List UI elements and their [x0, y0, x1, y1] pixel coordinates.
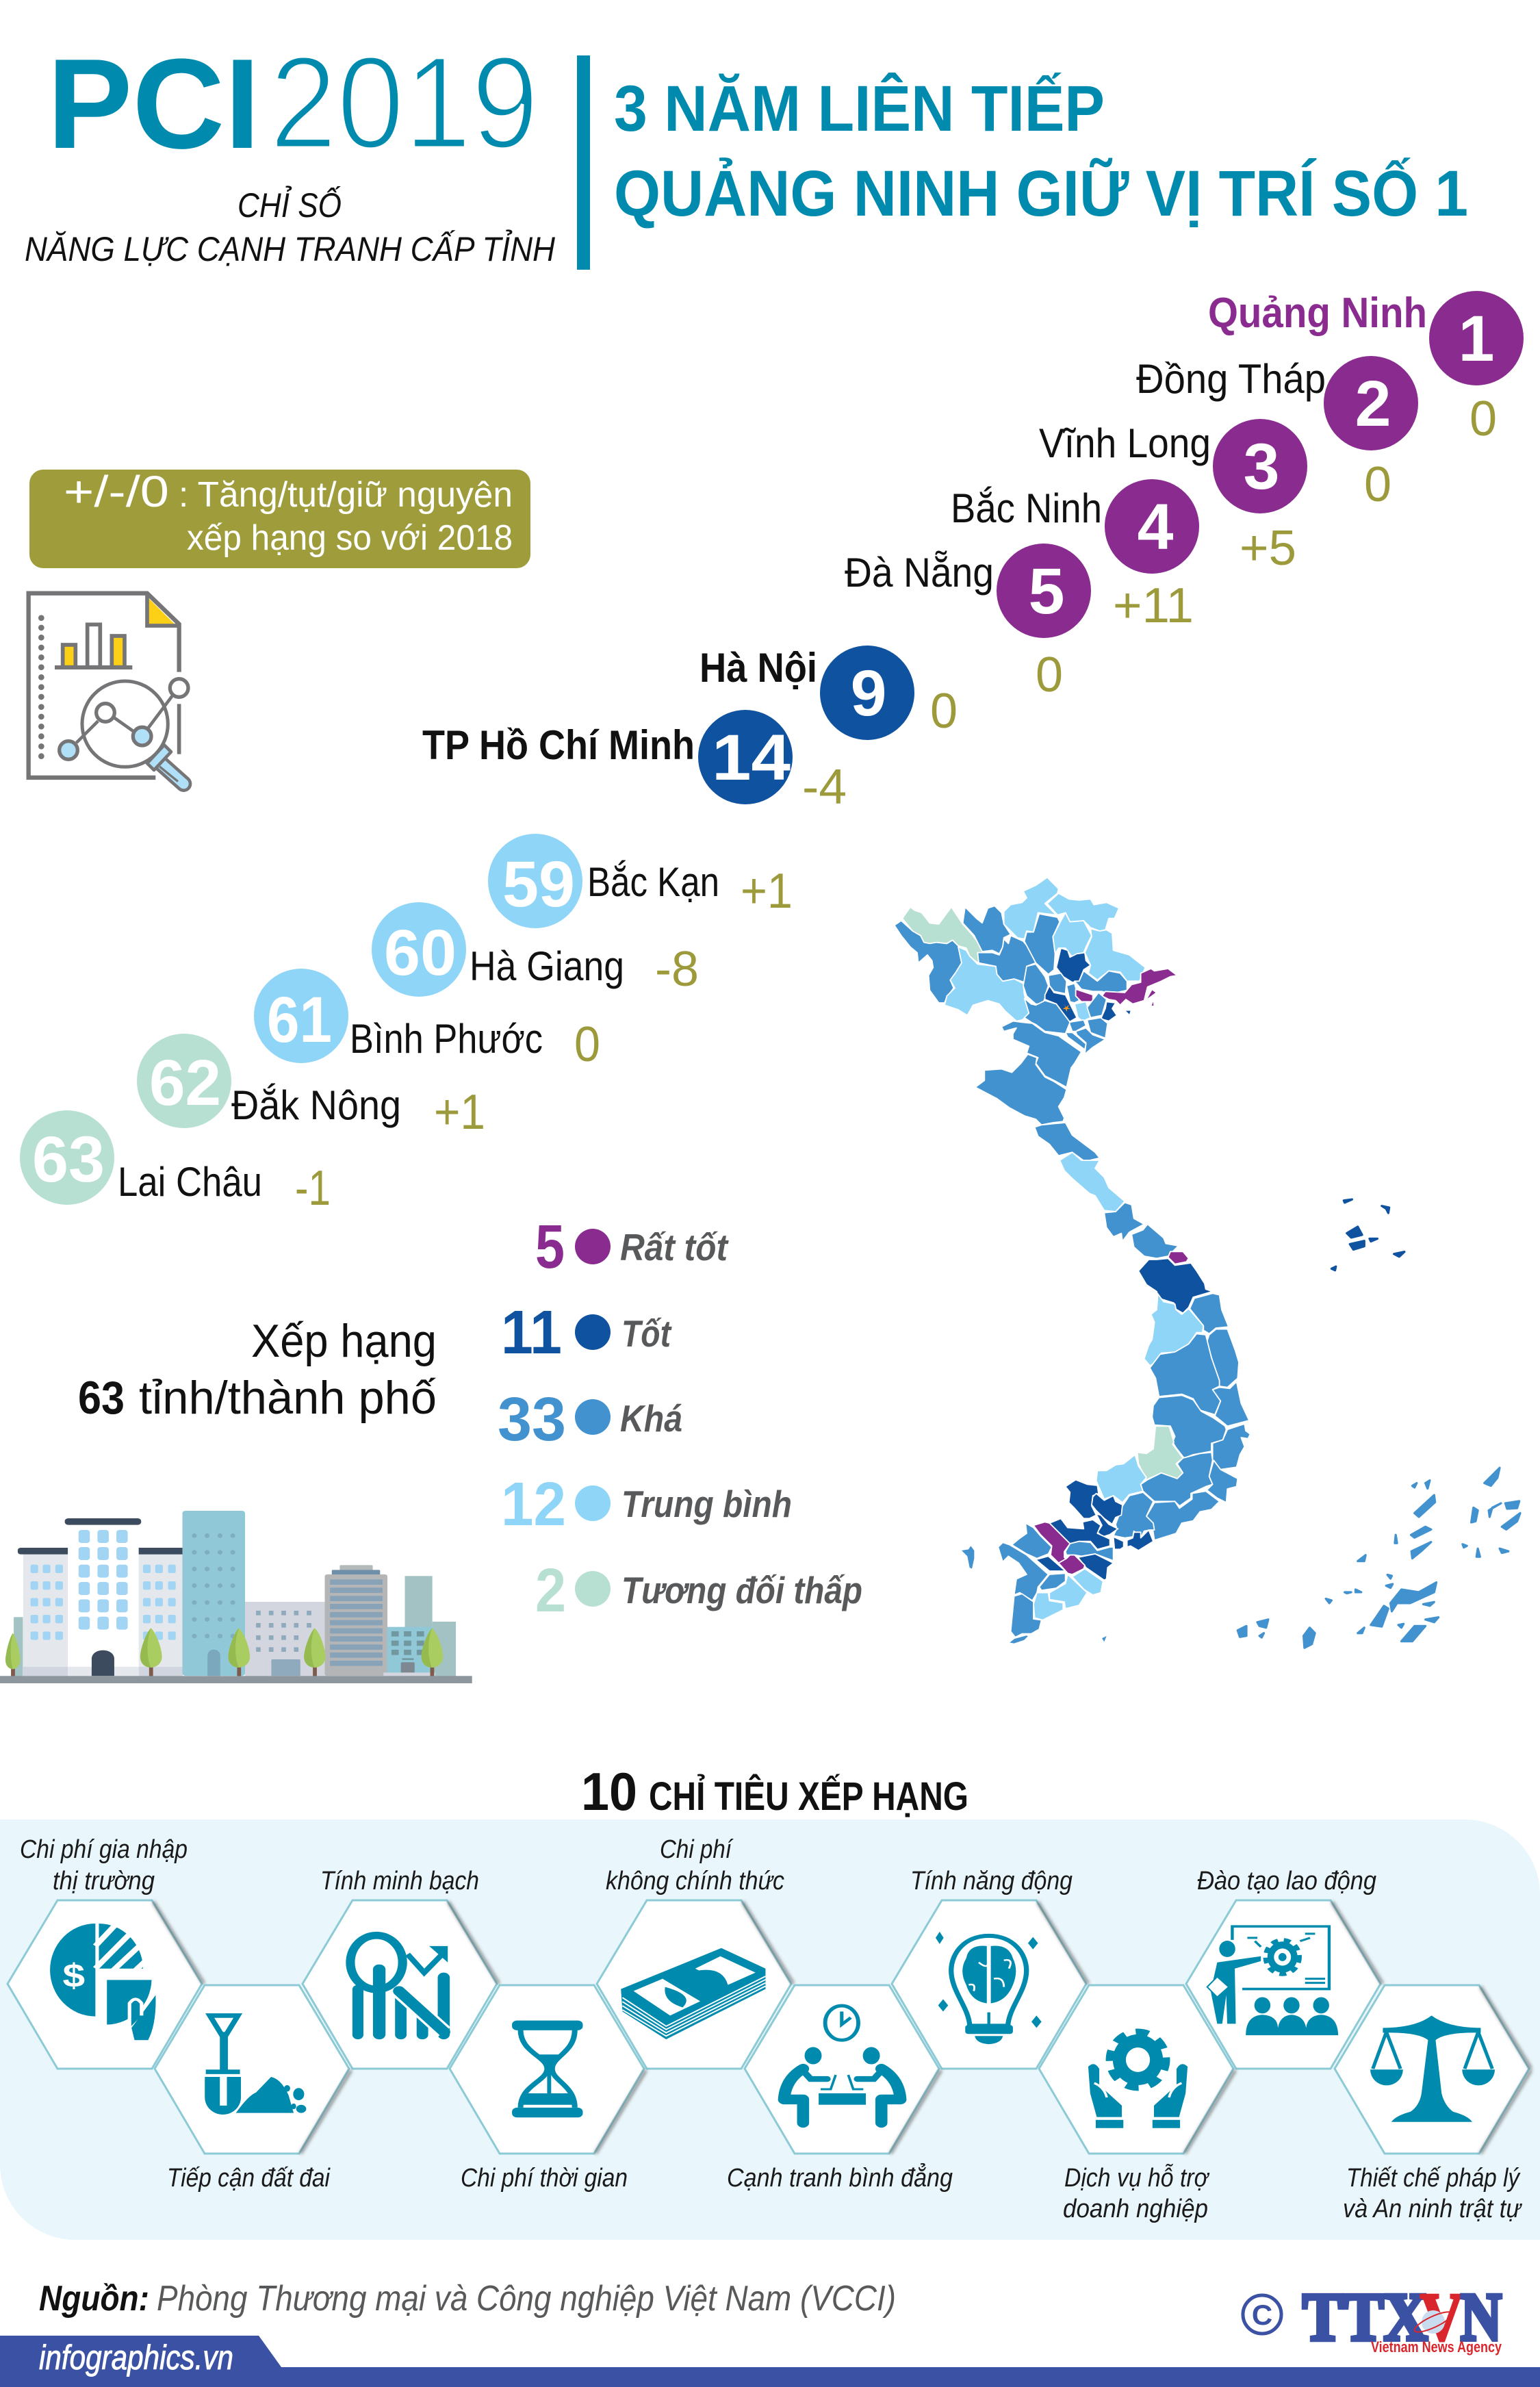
rank 5: Đà Nẵng: 5: [1029, 555, 1064, 628]
headline: QUẢNG NINH GIỮ VỊ TRÍ SỐ 1: [614, 157, 1468, 230]
rank 9: Hà Nội: Hà Nội: [700, 645, 817, 691]
icon: dynamism brain bulb: [936, 1932, 1042, 2044]
criteria labels: Tính minh bạch: [320, 1867, 479, 1895]
map legend: [498, 1213, 862, 1625]
icon: market entry cost: $: [62, 1958, 85, 1994]
caption: ranking of 63 provinces: Xếp hạng: [251, 1315, 437, 1367]
map: north central coast: [1060, 1152, 1213, 1313]
icon: informal charges money stack: [621, 1948, 765, 2039]
icons right half: [784, 1926, 1495, 2128]
criteria labels: Thiết chế pháp lý: [1346, 2164, 1521, 2193]
rank 60: Hà Giang: Hà Giang: [470, 943, 624, 989]
subtitle: provincial competitiveness index: NĂNG LỰC CẠNH TRANH CẤP TỈNH: [25, 229, 556, 268]
footer bar with site name: infographics.vn: [39, 2338, 233, 2377]
criteria labels: không chính thức: [606, 1867, 784, 1895]
rank 61: Bình Phước: [254, 969, 600, 1072]
bottom ranked provinces: [20, 834, 793, 1216]
logo: TTXVN copyright: TTX: [1302, 2279, 1428, 2355]
rank 2: Đồng Tháp: 2: [1355, 368, 1391, 440]
legend: very good: [535, 1213, 729, 1281]
rank 3: Vĩnh Long: Vĩnh Long: [1039, 420, 1211, 466]
legend: relatively low: [535, 1557, 862, 1625]
heading: 10 ranking criteria: 10: [581, 1761, 637, 1822]
criteria labels: Chi phí thời gian: [461, 2164, 628, 2193]
rank 2: Đồng Tháp: [1136, 356, 1418, 512]
legend: fair: 33: [498, 1386, 566, 1454]
legend: fair: [498, 1386, 682, 1454]
rank 60: Hà Giang: [372, 902, 699, 997]
rank 63: Lai Châu: [20, 1110, 331, 1216]
criteria labels: Tiếp cận đất đai: [167, 2164, 331, 2193]
logo: TTXVN copyright: N: [1461, 2279, 1502, 2355]
rank 2: Đồng Tháp: Đồng Tháp: [1136, 356, 1326, 402]
criteria labels: Đào tạo lao động: [1197, 1867, 1376, 1895]
criteria labels: thị trường: [53, 1867, 155, 1895]
legend: average: [501, 1470, 792, 1539]
rank 1: Quảng Ninh: 0: [1470, 392, 1497, 446]
rank 61: Bình Phước: 0: [574, 1017, 600, 1072]
map of Vietnam: [895, 878, 1520, 1648]
rank 3: Vĩnh Long: [1039, 419, 1307, 576]
legend badge: change meaning: [29, 467, 530, 568]
legend badge: change meaning: +/-/0: [64, 467, 169, 516]
criteria labels: [20, 1835, 1523, 2223]
rank 14: TP Hồ Chí Minh: -4: [802, 760, 847, 815]
rank 62: Đắk Nông: 62: [149, 1047, 221, 1119]
map: central highlands and south central coast: [1144, 1293, 1250, 1470]
icon: transparency magnifier and chart: [350, 1935, 450, 2039]
source line: Phòng Thương mại và Công nghiệp Việt Nam (VCCI): [157, 2279, 896, 2319]
rank 61: Bình Phước: 61: [267, 984, 332, 1056]
rank 14: TP Hồ Chí Minh: [422, 710, 847, 815]
title: PCI 2019: [47, 29, 539, 176]
rank 59: Bắc Kạn: +1: [741, 864, 793, 919]
rank 62: Đắk Nông: Đắk Nông: [231, 1082, 401, 1128]
map: northern provinces: [895, 878, 1177, 1162]
header divider bar: [577, 55, 590, 270]
map: Hoàng Sa and Trường Sa islands: [1237, 1199, 1520, 1648]
icon: business support gear and hands: [1088, 2032, 1188, 2128]
rank 62: Đắk Nông: +1: [434, 1085, 485, 1140]
rank 60: Hà Giang: 60: [384, 917, 457, 989]
icon: market entry cost: [50, 1919, 156, 2040]
rank 61: Bình Phước: Bình Phước: [350, 1016, 543, 1062]
icon: labour training: [1207, 1926, 1338, 2035]
rank 14: TP Hồ Chí Minh: 14: [712, 722, 791, 794]
rank 9: Hà Nội: 0: [930, 684, 958, 739]
caption: ranking of 63 provinces: [78, 1315, 437, 1424]
hexagon honeycomb: [8, 1900, 1531, 2154]
icon: fair competition: [784, 2006, 901, 2123]
rank 63: Lai Châu: Lai Châu: [118, 1159, 262, 1205]
legend: relatively low: 2: [535, 1557, 566, 1625]
rank 63: Lai Châu: 63: [32, 1123, 105, 1196]
rank 4: Bắc Ninh: [951, 479, 1199, 633]
legend: good: Tốt: [621, 1312, 672, 1355]
logo: TTXVN copyright: [1243, 2279, 1502, 2356]
rank 9: Hà Nội: 9: [851, 657, 886, 730]
caption: ranking of 63 provinces: tỉnh/thành phố: [139, 1372, 437, 1424]
rank 60: Hà Giang: -8: [655, 942, 699, 997]
logo: TTXVN copyright: Vietnam News Agency: [1371, 2338, 1502, 2356]
criteria labels: doanh nghiệp: [1063, 2195, 1208, 2223]
headline: 3 NĂM LIÊN TIẾP: [614, 73, 1105, 145]
legend: average: Trung bình: [621, 1483, 792, 1525]
legend: average: 12: [501, 1470, 566, 1539]
icon: city buildings: [0, 1511, 472, 1683]
logo: TTXVN copyright: C: [1252, 2299, 1272, 2331]
legend: good: [501, 1299, 672, 1367]
rank 4: Bắc Ninh: Bắc Ninh: [951, 485, 1102, 531]
headline: [614, 73, 1468, 230]
rank 1: Quảng Ninh: 1: [1459, 303, 1494, 375]
rank 3: Vĩnh Long: 3: [1244, 431, 1279, 503]
criteria labels: Tính năng động: [910, 1867, 1073, 1895]
panel: ten criteria hexagons: [0, 1820, 1540, 2240]
criteria labels: Chi phí gia nhập: [20, 1835, 188, 1864]
logo: TTXVN copyright: V: [1420, 2279, 1463, 2355]
legend badge: change meaning: : Tăng/tụt/giữ nguyên: [179, 475, 513, 515]
top ranked provinces: [422, 290, 1524, 815]
rank 4: Bắc Ninh: +11: [1113, 578, 1194, 633]
heading: 10 ranking criteria: CHỈ TIÊU XẾP HẠNG: [649, 1774, 968, 1819]
map: southern provinces: [962, 1426, 1237, 1644]
rank 3: Vĩnh Long: +5: [1240, 521, 1296, 576]
rank 1: Quảng Ninh: [1208, 290, 1524, 446]
criteria labels: Dịch vụ hỗ trợ: [1064, 2162, 1210, 2193]
rank 5: Đà Nẵng: [845, 544, 1091, 702]
rank 62: Đắk Nông: [137, 1034, 485, 1140]
rank 5: Đà Nẵng: 0: [1036, 648, 1063, 702]
rank 2: Đồng Tháp: 0: [1364, 457, 1391, 512]
rank 59: Bắc Kạn: [488, 834, 793, 928]
rank 5: Đà Nẵng: Đà Nẵng: [845, 550, 994, 596]
rank 9: Hà Nội: [700, 645, 958, 740]
source line: Nguồn:: [39, 2279, 149, 2319]
criteria labels: Chi phí: [660, 1835, 734, 1864]
title: PCI 2019: PCI: [47, 32, 260, 175]
legend: very good: 5: [535, 1213, 565, 1281]
rank 59: Bắc Kạn: Bắc Kạn: [587, 859, 719, 905]
subtitle: provincial competitiveness index: CHỈ SỐ: [238, 186, 342, 225]
criteria labels: Cạnh tranh bình đẳng: [727, 2162, 953, 2193]
legend: very good: Rất tốt: [620, 1226, 729, 1268]
subtitle: provincial competitiveness index: [25, 186, 556, 268]
legend: relatively low: Tương đối thấp: [621, 1569, 862, 1611]
criteria labels: và An ninh trật tự: [1343, 2195, 1523, 2223]
footer bar with site name: [0, 2336, 1540, 2387]
heading: 10 ranking criteria: [581, 1761, 968, 1822]
legend: good: 11: [501, 1299, 562, 1367]
icon: land access shovel: [205, 2015, 306, 2115]
rank 14: TP Hồ Chí Minh: TP Hồ Chí Minh: [422, 722, 695, 768]
title: PCI 2019: 2019: [270, 29, 539, 176]
icon: report with magnifier: [29, 593, 188, 784]
rank 4: Bắc Ninh: 4: [1138, 491, 1174, 563]
rank 63: Lai Châu: -1: [295, 1161, 331, 1216]
icon: legal institutions scales: [1370, 2015, 1495, 2122]
caption: ranking of 63 provinces: 63: [78, 1372, 125, 1424]
rank 59: Bắc Kạn: 59: [502, 848, 575, 921]
legend: fair: Khá: [620, 1397, 682, 1440]
icons left half: [50, 1919, 765, 2117]
rank 1: Quảng Ninh: Quảng Ninh: [1208, 290, 1427, 337]
legend badge: change meaning: xếp hạng so với 2018: [187, 518, 513, 558]
icon: time cost hourglass: [512, 2021, 582, 2117]
